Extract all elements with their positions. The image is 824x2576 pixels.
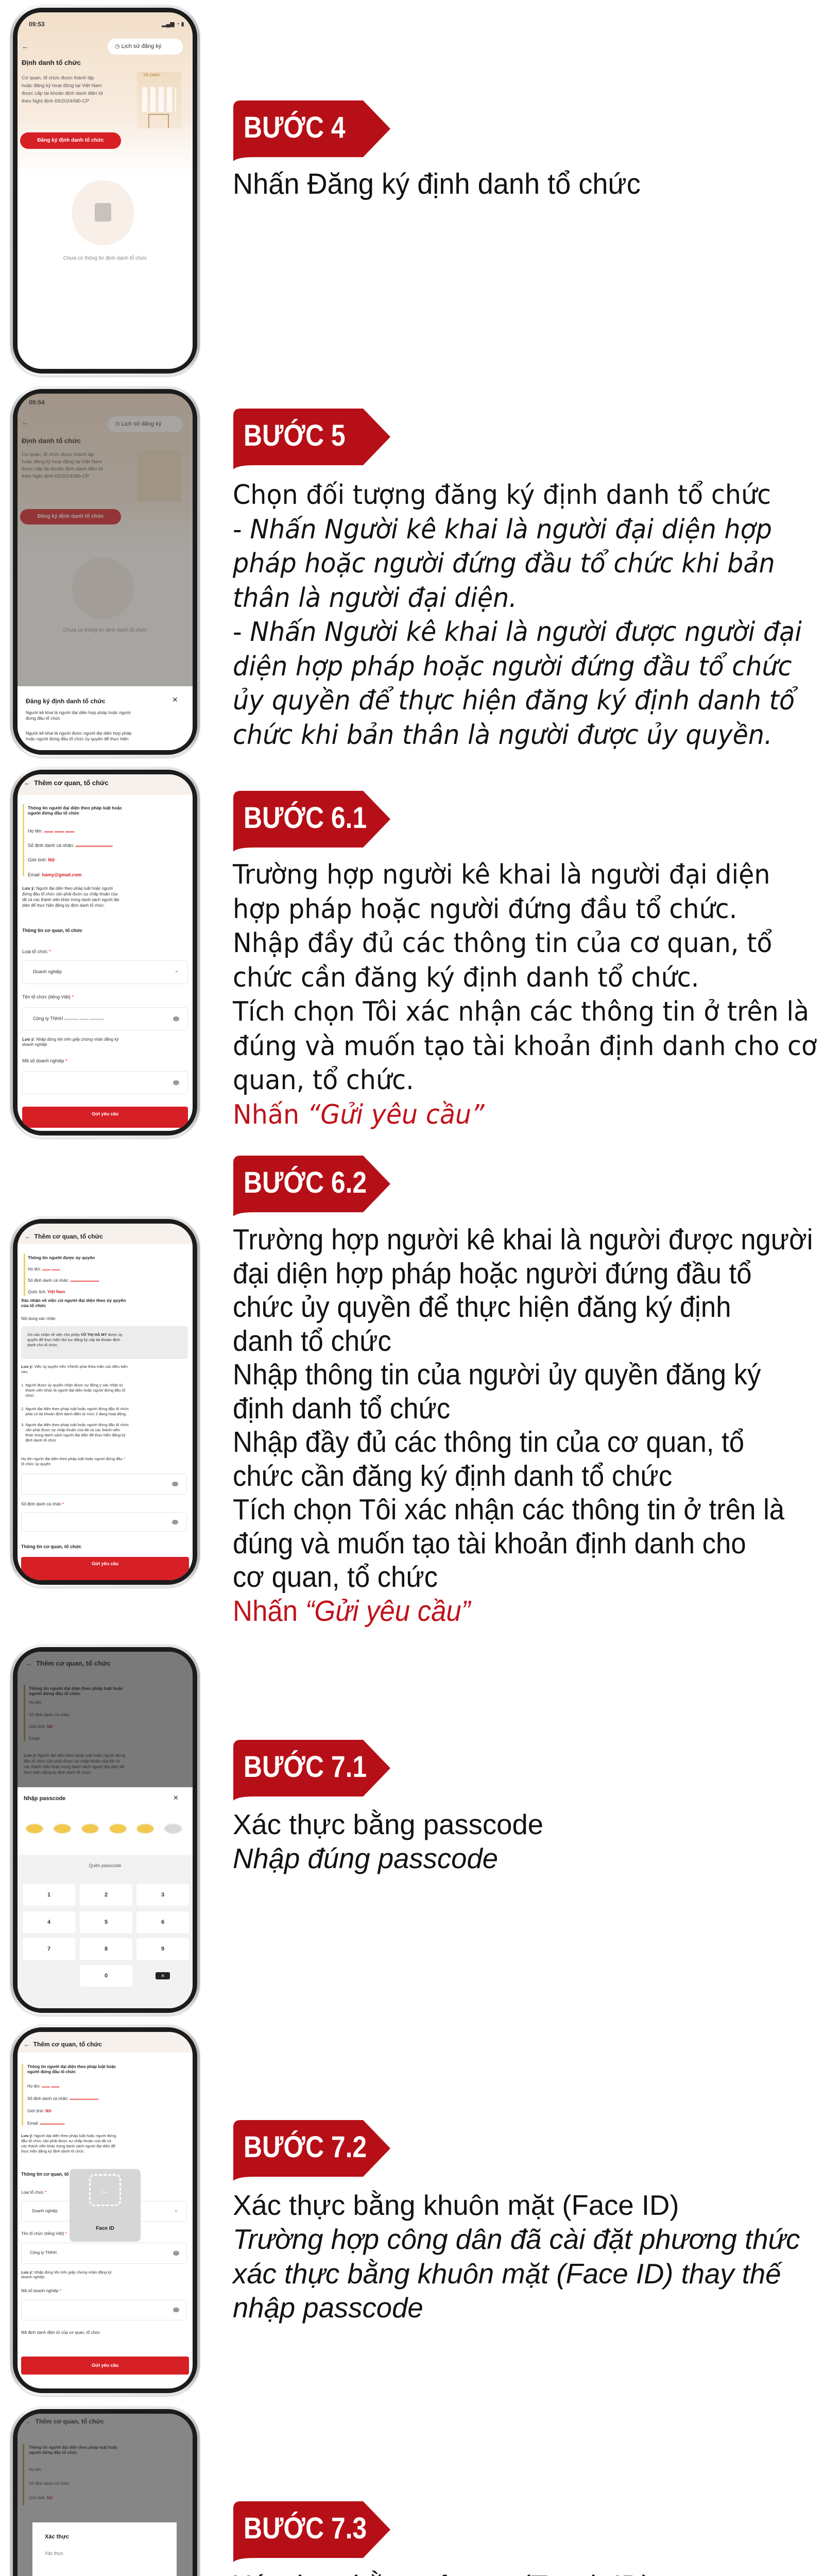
- passcode sheet: 2: [105, 1892, 108, 1898]
- phone: step 5 screen: [10, 386, 200, 757]
- text: step 6.2: Nhấn “Gửi yêu cầu”: [233, 1594, 470, 1627]
- phone: step 7.2 face id: Lưu ý: Người đại diện theo pháp luật hoặc người đứng: [21, 2133, 116, 2138]
- badge: step 7.1: [233, 1740, 390, 1801]
- passcode sheet: Nhập passcode: [24, 1795, 65, 1802]
- text: step 7.2: nhập passcode: [233, 2292, 423, 2324]
- phone: step 7.2 face id: Email: ▬▬▬▬▬▬: [27, 2121, 64, 2126]
- phone: step 7.1 passcode: Họ tên:: [29, 1700, 42, 1705]
- phone: step 5 screen: theo Nghị định 69/2024/NĐ-CP: [22, 473, 89, 479]
- phone: step 7.2 face id: người đứng đầu tổ chức: [27, 2070, 76, 2074]
- text: step 5: thân là người đại diện.: [233, 582, 517, 613]
- phone: step 7.2 face id: Mã số doanh nghiệp *: [21, 2289, 61, 2293]
- phone: step 4 screen: ▂▄▆ ◔ ▮: [162, 21, 184, 27]
- phone: step 6.2 form: Lưu ý: Việc ủy quyền trên VNeID phải thỏa mãn các điều kiện: [21, 1364, 128, 1369]
- phone: step 6.1 form: Lưu ý: Nhập đúng tên trên giấy chứng nhận đăng ký: [22, 1037, 118, 1042]
- phone: step 6.2 form: phải có tài khoản định danh điện tử mức 2 đang hoạt động.: [25, 1412, 127, 1416]
- text: step 7.1: [233, 1809, 543, 1874]
- phone: step 6.2 form: Số định danh cá nhân *: [21, 1502, 64, 1506]
- bottom sheet: ✕: [172, 696, 178, 704]
- icon: face id: [70, 2169, 141, 2242]
- phone: step 7.1 passcode: ← Thêm cơ quan, tổ chức: [26, 1659, 111, 1667]
- text: step 6.1: [233, 859, 817, 1130]
- bottom sheet: Đăng ký định danh tổ chức: [26, 698, 106, 705]
- phone: step 7.2 face id: đầu tổ chức cần phải được sự chấp thuận của tất cả: [21, 2139, 111, 2143]
- text: step 7.1: Nhập đúng passcode: [233, 1843, 498, 1874]
- dialog: touch id: Xác thực: [45, 2551, 63, 2556]
- text: step 6.1: quan, tổ chức.: [233, 1065, 414, 1096]
- phone: step 7.3 touch id: Số định danh cá nhân:: [29, 2481, 70, 2486]
- phone: step 4 screen: ←: [22, 42, 29, 50]
- passcode sheet: 6: [161, 1919, 164, 1925]
- phone: step 6.2 form: Nội dung xác nhận: [21, 1316, 56, 1321]
- icon: building: TỔ CHỨC: [143, 74, 160, 77]
- badge: step 7.3: BƯỚC 7.3: [244, 2512, 367, 2545]
- text: step 6.2: đúng và muốn tạo tài khoản định danh cho: [233, 1527, 746, 1560]
- phone: step 6.2 form: tổ chức ủy quyền: [21, 1462, 51, 1466]
- badge: step 5: [233, 409, 390, 469]
- phone: step 7.1 passcode: Số định danh cá nhân:: [29, 1713, 70, 1717]
- passcode sheet: 8: [105, 1946, 108, 1952]
- dialog: touch id: Xác thực: [45, 2534, 69, 2540]
- text: step 6.2: Tích chọn Tôi xác nhận các thông tin ở trên là: [233, 1493, 784, 1526]
- phone: step 7.2 face id: các thành viên khác trong danh sách người đại diện để: [21, 2144, 115, 2148]
- phone: step 4 screen: được cấp tài khoản định danh điện tử: [22, 91, 103, 96]
- badge: step 7.2: [233, 2120, 390, 2181]
- phone: step 6.1 form: người đứng đầu tổ chức: [28, 810, 79, 816]
- text: step 5: chức khi bản thân là người được ủy quyền.: [233, 719, 772, 750]
- icon: empty state: [72, 180, 134, 245]
- phone: step 7.3 touch id: Thông tin người đại diện theo pháp luật hoặc: [29, 2445, 117, 2450]
- phone: step 6.1 form: ← Thêm cơ quan, tổ chức: [24, 779, 109, 787]
- icon: fingerprint: [49, 2574, 74, 2576]
- phone: step 7.3 touch id: [10, 2406, 200, 2576]
- phone: step 6.1 form: Gửi yêu cầu: [92, 1111, 118, 1116]
- phone: step 5 screen: Đăng ký định danh tổ chức: [38, 514, 104, 519]
- badge: step 7.3: [233, 2501, 390, 2562]
- phone: step 6.2 form: Thông tin người được ủy quyền: [28, 1255, 95, 1260]
- phone: step 6.1 form: Giới tính: Nữ: [28, 857, 55, 862]
- phone: step 6.2 form: chức.: [25, 1393, 35, 1398]
- text: step 7.2: [232, 2190, 800, 2324]
- phone: step 6.1 form: Tên tổ chức (tiếng Việt) *: [22, 994, 74, 999]
- passcode sheet: ✕: [161, 1973, 165, 1978]
- text: step 6.2: Trường hợp người kê khai là người được người: [233, 1223, 813, 1256]
- phone: step 7.1 passcode: đầu tổ chức cần phải được sự chấp thuận của tất cả: [24, 1759, 119, 1764]
- badge: step 6.1: [233, 791, 390, 852]
- phone: step 6.2 form: Số định danh cá nhân: ▬▬▬▬▬▬▬: [28, 1278, 99, 1283]
- phone: step 6.2 form: 1. Người được ủy quyền nhận được sự đồng ý xác nhận từ: [21, 1383, 123, 1387]
- phone: step 6.2 form: ← Thêm cơ quan, tổ chức: [25, 1233, 103, 1240]
- phone: step 6.1 form: Thông tin người đại diện theo pháp luật hoặc: [28, 805, 122, 810]
- phone: step 6.2 form: Thông tin cơ quan, tổ chức: [21, 1544, 81, 1549]
- phone: step 6.2 form: danh cho tổ chức.: [27, 1343, 58, 1347]
- passcode sheet: Quên passcode: [89, 1863, 122, 1868]
- phone: step 6.2 form: Họ tên người đại diện theo pháp luật hoặc người đứng đầu *: [21, 1456, 125, 1461]
- badge: step 7.1: BƯỚC 7.1: [244, 1750, 367, 1784]
- phone: step 7.2 face id: Số định danh cá nhân: ▬▬▬▬▬▬▬: [27, 2096, 98, 2101]
- passcode sheet: 7: [47, 1946, 50, 1952]
- phone: step 7.2 face id: Họ tên: ▬▬ ▬▬: [27, 2084, 59, 2089]
- passcode sheet: 4: [47, 1919, 50, 1925]
- phone: step 7.1 passcode: Thông tin người đại diện theo pháp luật hoặc: [29, 1686, 123, 1691]
- phone: step 4 screen: Chưa có thông tin định danh tổ chức: [63, 256, 147, 261]
- passcode sheet: 1: [47, 1892, 50, 1898]
- phone: step 7.2 face id: Thông tin cơ quan, tổ chức: [21, 2172, 81, 2177]
- phone: step 6.2 form: cần phải được sự chấp thuận của tất cả các thành viên: [25, 1428, 120, 1432]
- phone: step 6.2 form: thành viên khác là người đại diện hoặc người đứng đầu tổ: [25, 1388, 125, 1393]
- icon: face id: Face ID: [96, 2226, 114, 2231]
- text: step 6.2: cơ quan, tổ chức: [233, 1561, 438, 1594]
- phone: step 6.2 form: quyền để thực hiện thủ tục đăng ký cấp tài khoản định: [27, 1337, 120, 1342]
- phone: step 7.2 face id: doanh nghiệp: [21, 2275, 44, 2279]
- badge: step 4: BƯỚC 4: [244, 111, 346, 144]
- bottom sheet: đứng đầu tổ chức: [26, 716, 60, 721]
- phone: step 7.2 face id: Doanh nghiệp: [32, 2209, 58, 2213]
- phone: step 6.1 form: Thông tin cơ quan, tổ chức: [22, 928, 82, 933]
- phone: step 7.2 face id: ← Thêm cơ quan, tổ chức: [24, 2041, 102, 2048]
- phone: step 4 screen: hoặc đăng ký hoạt động tại Việt Nam: [22, 83, 102, 89]
- badge: step 6.2: BƯỚC 6.2: [244, 1166, 367, 1199]
- bottom sheet: hoặc người đứng đầu tổ chức ủy quyền để thực hiện: [26, 736, 128, 741]
- phone: step 6.1 form: diện để thực hiện đăng ký định danh tổ chức.: [22, 903, 105, 908]
- phone: step 5 screen: ◷ Lịch sử đăng ký: [115, 421, 161, 427]
- phone: step 4 screen: 09:53: [29, 21, 45, 28]
- phone: step 6.1 form: Mã số doanh nghiệp *: [22, 1058, 67, 1063]
- phone: step 6.1 form: [10, 767, 200, 1138]
- phone: step 6.1 form: tất cả các thành viên khác trong danh sách người đại: [22, 897, 119, 902]
- text: step 6.2: Nhập đầy đủ các thông tin của cơ quan, tổ: [233, 1426, 744, 1459]
- text: step 5: - Nhấn Người kê khai là người đại diện hợp: [233, 514, 772, 545]
- phone: step 7.1 passcode: Email:: [29, 1736, 40, 1741]
- passcode sheet: [18, 1787, 193, 2008]
- phone: step 7.2 face id: ⌄: [174, 2208, 178, 2213]
- text: step 5: [233, 480, 802, 750]
- phone: step 6.2 form: [10, 1216, 200, 1587]
- badge: step 6.1: BƯỚC 6.1: [244, 801, 367, 835]
- phone: step 7.2 face id: [10, 2025, 200, 2396]
- passcode sheet: ✕: [173, 1794, 179, 1802]
- phone: step 6.1 form: Loại tổ chức *: [22, 949, 51, 954]
- text: step 7.1: Xác thực bằng passcode: [233, 1809, 543, 1840]
- passcode sheet: 9: [161, 1946, 164, 1952]
- phone: step 4 screen: [10, 5, 200, 376]
- phone: step 6.2 form: Quốc tịch: Việt Nam: [28, 1290, 65, 1294]
- text: step 5: Chọn đối tượng đăng ký định danh tổ chức: [233, 480, 771, 511]
- phone: step 6.2 form: Xác nhận về việc cử người đại diện theo ủy quyền: [21, 1298, 126, 1303]
- phone: step 7.2 face id: Loại tổ chức *: [21, 2190, 46, 2195]
- text: step 6.1: đúng và muốn tạo tài khoản định danh cho cơ: [233, 1030, 817, 1061]
- text: step 6.2: [233, 1223, 813, 1627]
- badge: step 5: BƯỚC 5: [244, 419, 346, 452]
- phone: step 7.1 passcode: các thành viên khác trong danh sách người đại diện để: [24, 1765, 124, 1769]
- phone: step 7.2 face id: Mã định danh điện tử của cơ quan, tổ chức: [21, 2330, 100, 2335]
- text: step 6.1: Nhập đầy đủ các thông tin của cơ quan, tổ: [233, 928, 772, 959]
- phone: step 6.2 form: Họ tên: ▬▬ ▬▬: [28, 1267, 60, 1272]
- phone: step 5 screen: được cấp tài khoản định danh điện tử: [22, 466, 103, 472]
- text: step 6.1: chức cần đăng ký định danh tổ chức.: [233, 962, 699, 993]
- phone: step 4 screen: Đăng ký định danh tổ chức: [38, 138, 104, 143]
- phone: step 6.1 form: Họ tên: ▬▬ ▬▬ ▬▬: [28, 828, 75, 834]
- phone: step 7.2 face id: Tên tổ chức (tiếng Việt) *: [21, 2231, 67, 2236]
- text: step 6.1: Tích chọn Tôi xác nhận các thông tin ở trên là: [233, 996, 809, 1027]
- text: step 4: Nhấn Đăng ký định danh tổ chức: [233, 167, 641, 200]
- phone: step 5 screen: Định danh tổ chức: [22, 437, 81, 445]
- phone: step 6.1 form: ⌄: [175, 968, 179, 973]
- text: step 6.2: chức ủy quyền để thực hiện đăng ký định: [233, 1291, 731, 1324]
- dialog: touch id: [32, 2522, 177, 2576]
- phone: step 6.2 form: 2. Người đại diện theo pháp luật hoặc người đứng đầu tổ chức: [21, 1406, 129, 1411]
- passcode sheet: 3: [161, 1892, 164, 1898]
- text: step 6.2: chức cần đăng ký định danh tổ chức: [233, 1459, 672, 1492]
- phone: step 7.1 passcode: thực hiện đăng ký định danh tổ chức.: [24, 1770, 92, 1775]
- badge: step 7.2: BƯỚC 7.2: [244, 2130, 367, 2164]
- bottom sheet: Người kê khai là người đại diện hợp pháp hoặc người: [26, 710, 131, 715]
- phone: step 4 screen: ◷ Lịch sử đăng ký: [115, 43, 161, 49]
- phone: step 7.2 face id: Giới tính: Nữ: [27, 2109, 52, 2113]
- phone: step 6.2 form: Gửi yêu cầu: [92, 1561, 118, 1566]
- phone: step 6.2 form: sau:: [21, 1369, 28, 1374]
- phone: step 7.2 face id: thực hiện đăng ký định danh tổ chức.: [21, 2149, 85, 2154]
- text: step 5: - Nhấn Người kê khai là người được người đại: [233, 617, 802, 648]
- text: step 5: diện hợp pháp hoặc người đứng đầu tổ chức: [233, 651, 792, 682]
- phone: step 5 screen: 09:54: [29, 399, 45, 406]
- text: step 6.1: Nhấn “Gửi yêu cầu”: [233, 1099, 485, 1130]
- phone: step 5 screen: ←: [22, 418, 29, 427]
- phone: step 7.3 touch id: ← Thêm cơ quan, tổ chức: [26, 2418, 104, 2425]
- text: step 7.2: Xác thực bằng khuôn mặt (Face ID): [233, 2190, 679, 2221]
- phone: step 5 screen: hoặc đăng ký hoạt động tại Việt Nam: [22, 459, 102, 465]
- phone: step 6.1 form: Số định danh cá nhân: ▬▬▬▬▬▬▬▬: [28, 843, 113, 848]
- phone: step 7.3 touch id: Giới tính: Nữ: [29, 2496, 53, 2500]
- phone: step 6.1 form: Email: hamy@gmail.com: [28, 872, 81, 877]
- text: step 7.2: xác thực bằng khuôn mặt (Face ID) thay thế: [233, 2258, 781, 2290]
- text: step 6.1: Trường hợp người kê khai là người đại diện: [233, 859, 770, 890]
- bottom sheet: Người kê khai là người được người đại diện hợp pháp: [26, 731, 132, 736]
- phone: step 6.1 form: đứng đầu tổ chức cần phải được sự chấp thuận của: [22, 892, 117, 896]
- passcode sheet: 5: [105, 1919, 108, 1925]
- phone: step 7.2 face id: Thông tin người đại diện theo pháp luật hoặc: [27, 2064, 116, 2069]
- phone: step 4 screen: Định danh tổ chức: [22, 59, 81, 66]
- phone: step 7.3 touch id: người đứng đầu tổ chức: [29, 2450, 77, 2455]
- phone: step 5 screen: Cơ quan, tổ chức được thành lập: [22, 452, 94, 457]
- badge: step 6.2: [233, 1156, 390, 1216]
- text: step 6.1: hợp pháp hoặc người đứng đầu tổ chức.: [233, 893, 737, 924]
- text: step 7.2: Trường hợp công dân đã cài đặt phương thức: [233, 2224, 800, 2255]
- text: step 6.2: định danh tổ chức: [233, 1392, 450, 1425]
- phone: step 7.1 passcode: người đứng đầu tổ chức: [29, 1691, 80, 1696]
- text: step 5: ủy quyền để thực hiện đăng ký định danh tổ: [233, 685, 795, 716]
- phone: step 6.1 form: Công ty TNHH ▬▬▬ ▬▬ ▬▬▬: [33, 1016, 104, 1021]
- phone: step 7.3 touch id: Họ tên:: [29, 2467, 42, 2472]
- phone: step 7.2 face id: Công ty TNHH: [30, 2250, 57, 2255]
- phone: step 6.1 form: Doanh nghiệp: [33, 969, 62, 974]
- phone: step 6.1 form: doanh nghiệp: [22, 1042, 47, 1047]
- phone: step 4 screen: theo Nghị định 69/2024/NĐ-CP: [22, 98, 89, 104]
- phone: step 6.1 form: Lưu ý: Người đại diện theo pháp luật hoặc người: [22, 886, 113, 891]
- phone: step 7.1 passcode: Lưu ý: Người đại diện theo pháp luật hoặc người đứng: [24, 1753, 125, 1758]
- text: step 5: pháp hoặc người đứng đầu tổ chức khi bản: [233, 548, 775, 579]
- phone: step 7.1 passcode: [10, 1645, 200, 2015]
- passcode sheet: 0: [105, 1973, 108, 1979]
- phone: step 6.2 form: 3. Người đại diện theo pháp luật hoặc người đứng đầu tổ chức: [21, 1422, 129, 1427]
- text: step 6.2: Nhập thông tin của người ủy quyền đăng ký: [233, 1358, 761, 1391]
- phone: step 6.2 form: Xin xác nhận về việc cho phép VŨ THỊ HÀ MY được ủy: [27, 1332, 123, 1337]
- bottom sheet: [18, 686, 193, 750]
- phone: step 5 screen: Chưa có thông tin định danh tổ chức: [63, 628, 147, 633]
- phone: step 7.2 face id: Lưu ý: Nhập đúng tên trên giấy chứng nhận đăng ký: [21, 2270, 112, 2275]
- phone: step 6.2 form: khác trong danh sách người đại diện để thực hiện đăng ký: [25, 1433, 126, 1437]
- phone: step 6.2 form: định danh tổ chức: [25, 1438, 56, 1443]
- phone: step 6.2 form: của tổ chức: [21, 1303, 46, 1308]
- icon: building: [137, 72, 181, 128]
- phone: step 4 screen: Cơ quan, tổ chức được thành lập: [22, 75, 94, 81]
- text: step 6.2: danh tổ chức: [233, 1324, 391, 1357]
- phone: step 7.2 face id: Gửi yêu cầu: [92, 2363, 118, 2368]
- icon: face id: ·͜·: [99, 2184, 105, 2193]
- badge: step 4: [233, 100, 390, 161]
- phone: step 7.1 passcode: Giới tính: Nữ: [29, 1724, 53, 1729]
- text: step 6.2: đại diện hợp pháp hoặc người đứng đầu tổ: [233, 1257, 752, 1290]
